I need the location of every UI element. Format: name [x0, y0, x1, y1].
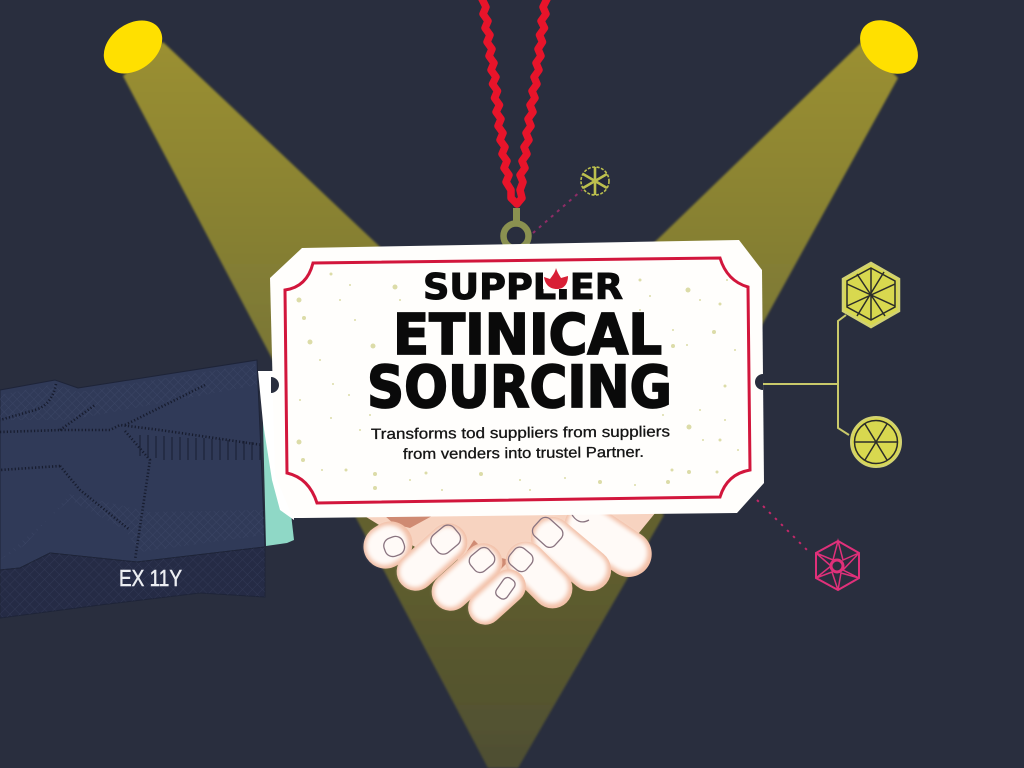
stitched creases: [0, 384, 262, 560]
icon: pink hexagon: [816, 541, 859, 590]
heading: etinical: ETINICAL: [393, 303, 662, 368]
card punch hole right: [755, 374, 763, 390]
finger 2: [389, 515, 475, 599]
finger 6: [522, 508, 620, 600]
heading: supplier: SUPPLIER: [423, 267, 623, 308]
finger 7: [555, 494, 661, 586]
icon: small wheel: [581, 167, 609, 195]
suit sleeve: [0, 360, 265, 618]
finger 4: [461, 562, 533, 632]
hanging ring: [504, 208, 528, 248]
spotlight beams: [123, 42, 898, 768]
sleeve upper: [0, 360, 265, 570]
sleeve band weave: [0, 547, 265, 618]
speckle texture: [296, 272, 739, 491]
sleeve cuff: [258, 371, 294, 546]
dotted link: ring to small icon: [533, 190, 582, 233]
dotted link: card to pink icon: [757, 500, 810, 553]
heading: sourcing: SOURCING: [367, 353, 672, 421]
connector lines to right icons: [762, 315, 849, 435]
palm shadow: [385, 516, 510, 570]
red ornamental border: [285, 258, 750, 503]
icon: geometric circle: [851, 417, 901, 467]
description text: Transforms tod suppliers from suppliers: [371, 423, 670, 443]
sleeve label: EX 11Y: [119, 565, 182, 591]
spotlight lamp: right: [850, 9, 928, 85]
description text: from venders into trustel Partner.: [403, 444, 644, 463]
hand holding card: [355, 494, 661, 632]
finger 3: [424, 535, 510, 619]
card punch hole left: [271, 377, 279, 393]
icon: geometric hexagon: [843, 263, 899, 327]
palm: [358, 512, 656, 600]
finger 5: [497, 533, 581, 617]
crease hatching: [140, 435, 260, 460]
fingernails: [382, 513, 589, 601]
red rope: [481, 0, 548, 204]
icon: red flame: [543, 268, 570, 289]
spotlight lamp: left: [94, 10, 172, 84]
card body: [270, 240, 764, 518]
finger 1: [355, 513, 421, 577]
sleeve weave shading: [0, 364, 257, 420]
ticket card: [270, 240, 764, 518]
sleeve lower band: [0, 547, 265, 618]
description text: [371, 423, 670, 463]
